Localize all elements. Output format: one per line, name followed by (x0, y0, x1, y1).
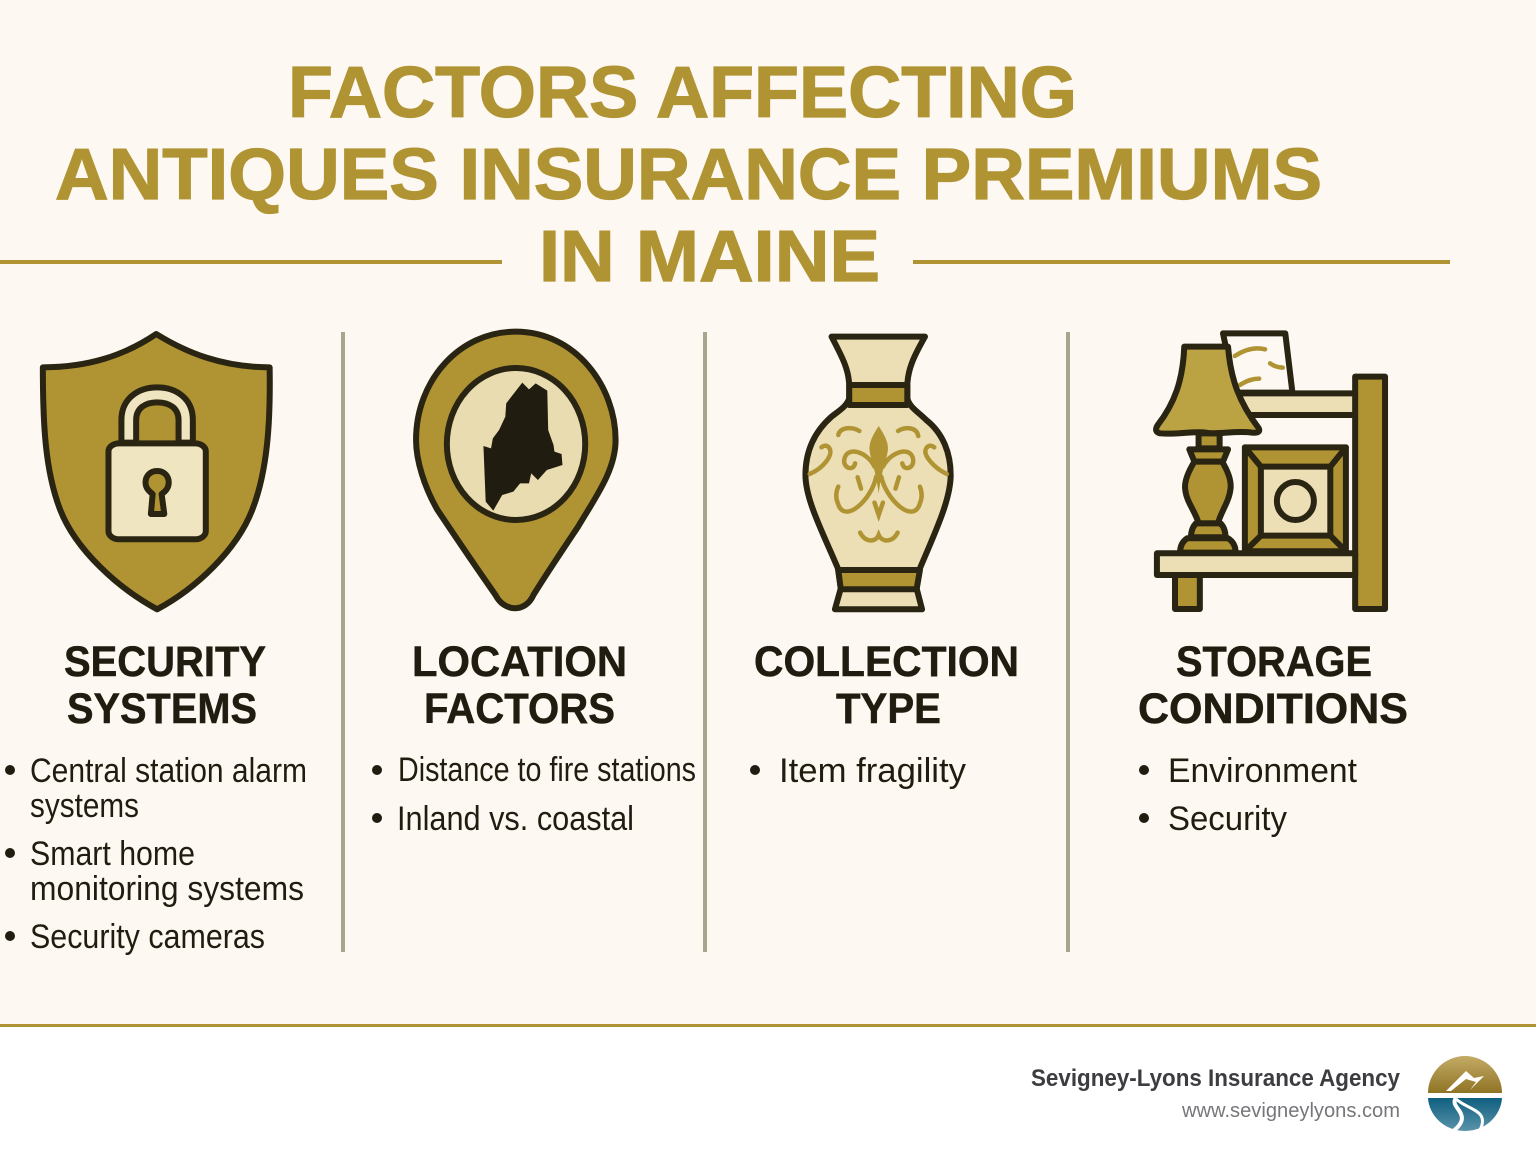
icon: decorated vase (805, 337, 951, 609)
title: FACTORS AFFECTING (288, 53, 1077, 133)
list: security systems: Central station alarm (30, 752, 307, 790)
panel: collection type (750, 337, 1019, 790)
list: storage conditions: Security (1168, 800, 1287, 838)
heading: collection type: COLLECTION (754, 638, 1019, 686)
heading: collection type: TYPE (836, 685, 941, 733)
heading: security systems (64, 638, 266, 733)
footer: agency name and website: www.sevigneylyons.com (1181, 1100, 1400, 1122)
icon: shield with padlock (43, 334, 270, 609)
heading: storage conditions (1138, 638, 1408, 733)
list: security systems: monitoring systems (30, 870, 304, 908)
icon: lamp, frame and shelf (1156, 333, 1385, 609)
panel: security systems (5, 334, 307, 956)
heading: location factors: FACTORS (424, 685, 615, 733)
icon: map pin with Maine silhouette (416, 332, 616, 608)
heading: location factors (412, 638, 627, 733)
icon: agency logo (1428, 1056, 1502, 1132)
heading: storage conditions: STORAGE (1176, 638, 1372, 686)
title: ANTIQUES INSURANCE PREMIUMS (55, 135, 1322, 215)
list: location factors (372, 751, 696, 838)
list: security systems: systems (30, 787, 139, 825)
panel: storage conditions (1138, 333, 1408, 838)
list: location factors: Inland vs. coastal (397, 800, 634, 838)
heading: location factors: LOCATION (412, 638, 627, 686)
list: collection type: Item fragility (779, 752, 966, 790)
footer: agency name and website (1031, 1065, 1401, 1122)
footer: agency name and website: Sevigney-Lyons Insurance Agency (1031, 1065, 1401, 1092)
list: location factors: Distance to fire stations (398, 751, 696, 789)
heading: collection type (754, 638, 1019, 733)
list: security systems: Smart home (30, 835, 195, 873)
list: storage conditions: Environment (1168, 752, 1358, 790)
list: storage conditions (1139, 752, 1358, 838)
list: security systems (5, 752, 307, 956)
title (55, 53, 1322, 297)
panel: location factors (372, 332, 696, 838)
list: security systems: Security cameras (30, 918, 265, 956)
heading: security systems: SYSTEMS (67, 685, 257, 733)
heading: security systems: SECURITY (64, 638, 266, 686)
heading: storage conditions: CONDITIONS (1138, 685, 1408, 733)
title: IN MAINE (539, 217, 880, 297)
